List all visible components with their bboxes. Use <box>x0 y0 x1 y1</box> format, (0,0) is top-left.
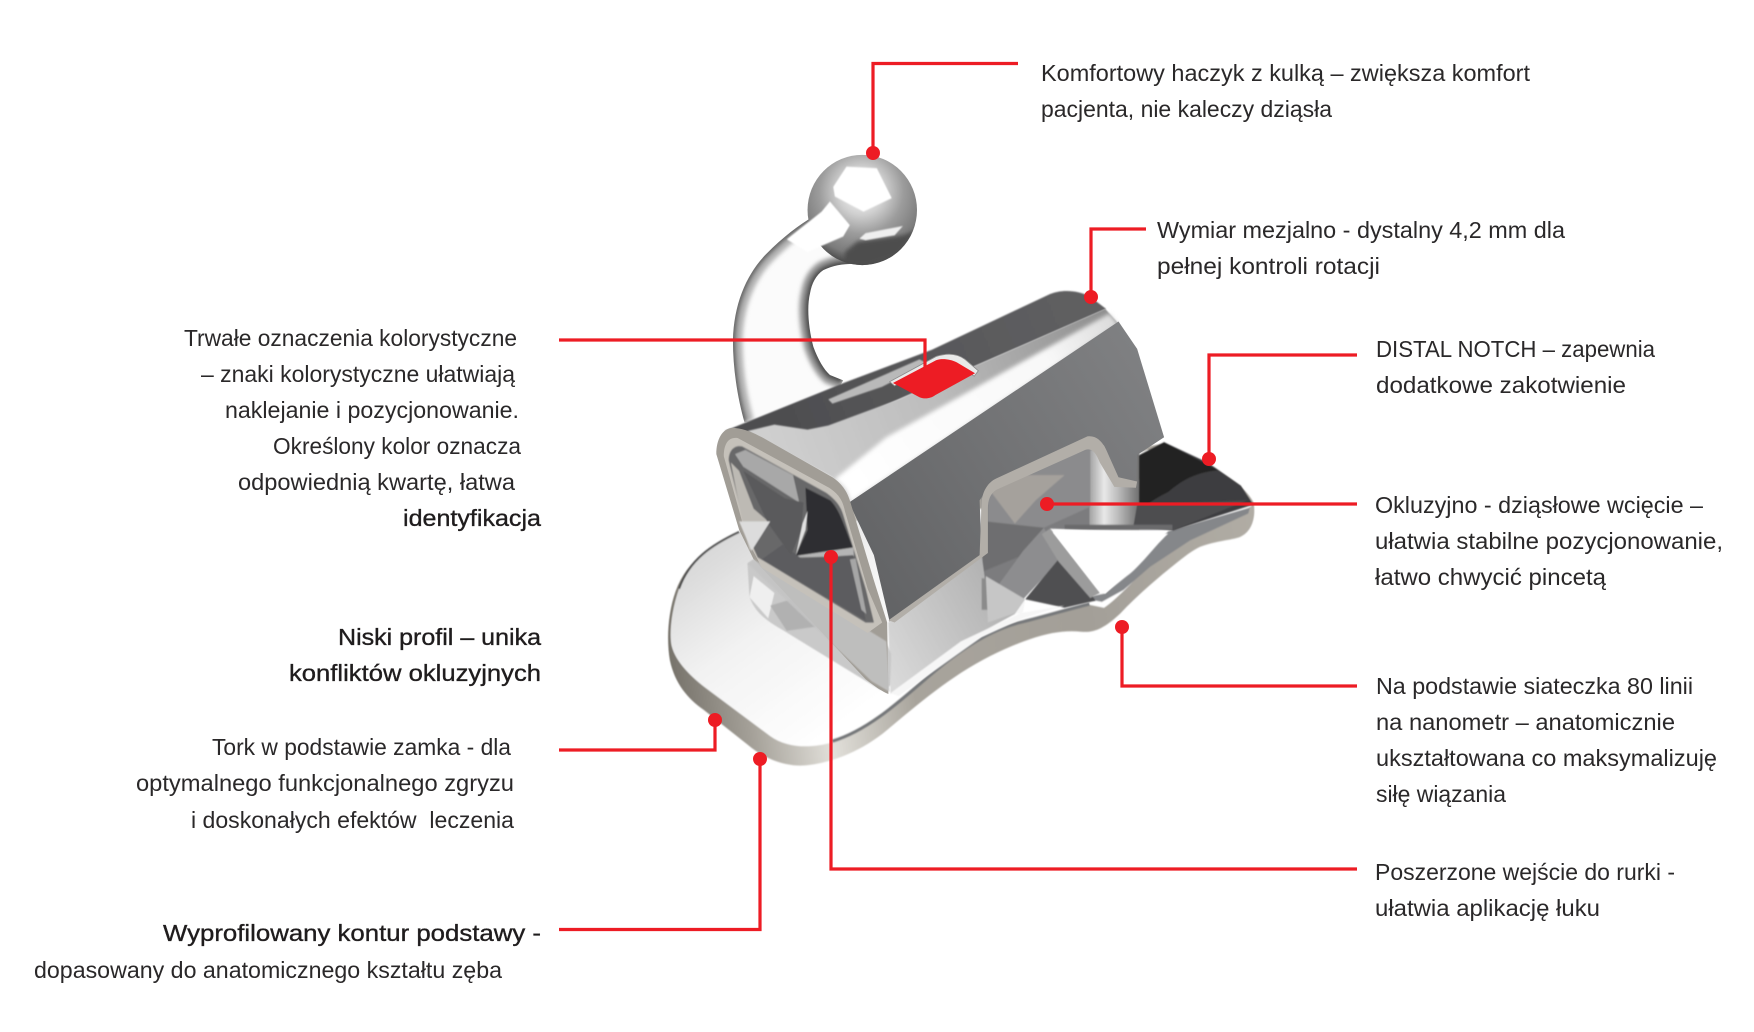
mesh base text <box>1376 673 1717 807</box>
callout: mesh base <box>1115 620 1717 807</box>
hook neck highlight <box>787 202 850 252</box>
contoured base text: dopasowany do anatomicznego kształtu zęba <box>34 957 502 983</box>
color marking text: naklejanie i pozycjonowanie. <box>225 397 519 423</box>
mesh base leader line <box>1122 627 1357 686</box>
hook leader line <box>873 64 1018 153</box>
distal notch text: dodatkowe zakotwienie <box>1376 372 1626 398</box>
upper light band <box>747 309 1118 502</box>
tube front frame <box>716 428 888 694</box>
notch recess and lower facets <box>888 446 1247 696</box>
width dot <box>1084 290 1098 304</box>
width leader line <box>1091 229 1146 297</box>
occluso-gingival text: Okluzyjno - dziąsłowe wcięcie – <box>1375 492 1703 518</box>
hook text: pacjenta, nie kaleczy dziąsła <box>1041 96 1332 122</box>
distal notch text: DISTAL NOTCH – zapewnia <box>1376 336 1655 362</box>
hook dot <box>866 146 880 160</box>
torque text: Tork w podstawie zamka - dla <box>212 734 511 760</box>
tube entry dot <box>824 550 838 564</box>
color marking text <box>184 325 541 531</box>
color marking text: odpowiednią kwartę, łatwa <box>238 469 515 495</box>
mesh base text: Na podstawie siateczka 80 linii <box>1376 673 1693 699</box>
torque text <box>136 734 514 833</box>
callout: widened tube entry <box>824 550 1675 921</box>
tube entry text <box>1375 859 1675 921</box>
contoured base leader line <box>559 759 760 930</box>
text: low profile: Niski profil – unika <box>338 624 541 650</box>
mesh base text: na nanometr – anatomicznie <box>1376 709 1675 735</box>
torque leader line <box>559 720 715 750</box>
callout: mesio-distal width <box>1084 217 1565 304</box>
occluso-gingival leader line <box>1047 502 1357 506</box>
tube entry text: ułatwia aplikację łuku <box>1375 895 1600 921</box>
text: low profile: konfliktów okluzyjnych <box>289 660 541 686</box>
distal wing dark surface <box>1133 442 1253 530</box>
illustration: orthodontic bracket <box>668 155 1254 766</box>
callout: contoured base <box>34 752 767 983</box>
hook text <box>1041 60 1531 122</box>
distal notch text <box>1376 336 1655 398</box>
color marking text: Określony kolor oznacza <box>273 433 521 459</box>
occluso-gingival dot <box>1040 497 1054 511</box>
callout: distal notch <box>1202 336 1655 466</box>
torque text: optymalnego funkcjonalnego zgryzu <box>136 770 514 796</box>
torque text: i doskonałych efektów leczenia <box>191 807 514 833</box>
callout: color marking <box>184 325 925 531</box>
color marking leader line <box>559 340 925 378</box>
width text: Wymiar mezjalno - dystalny 4,2 mm dla <box>1157 217 1565 243</box>
color marking text: identyfikacja <box>403 505 541 531</box>
top light ridge near marker <box>828 359 928 404</box>
tube body <box>716 291 1164 694</box>
tube opening interior <box>729 446 874 622</box>
occluso-gingival text: ułatwia stabilne pozycjonowanie, <box>1375 528 1723 554</box>
hook text: Komfortowy haczyk z kulką – zwiększa komfort <box>1041 60 1531 86</box>
color marking text: Trwałe oznaczenia kolorystyczne <box>184 325 517 351</box>
white highlight strip <box>834 314 1118 502</box>
contoured base text: Wyprofilowany kontur podstawy - <box>163 920 541 946</box>
text: low profile <box>289 624 541 686</box>
red color mark <box>893 359 975 398</box>
hook ball <box>787 155 917 267</box>
white triangular wing facet <box>1050 529 1168 593</box>
callout: torque in base <box>136 713 722 833</box>
width text <box>1157 217 1565 279</box>
contoured base dot <box>753 752 767 766</box>
occluso-gingival text <box>1375 492 1723 590</box>
contoured base text <box>34 920 541 983</box>
body side face <box>849 322 1164 622</box>
callout: comfort hook <box>866 60 1531 160</box>
bracket base pad <box>668 444 1254 766</box>
ghosted reflection below tube <box>747 559 891 690</box>
mesh base dot <box>1115 620 1129 634</box>
width text: pełnej kontroli rotacji <box>1157 253 1380 279</box>
color mark frame <box>890 354 978 386</box>
distal notch dot <box>1202 452 1216 466</box>
callout: occluso-gingival notch <box>1040 492 1723 590</box>
hook stem <box>733 220 851 422</box>
occluso-gingival text: łatwo chwycić pincetą <box>1375 564 1606 590</box>
mesh base text: siłę wiązania <box>1376 781 1506 807</box>
tube entry leader line <box>831 557 1357 869</box>
tube entry text: Poszerzone wejście do rurki - <box>1375 859 1675 885</box>
mesh base text: ukształtowana co maksymalizuję <box>1376 745 1717 771</box>
torque dot <box>708 713 722 727</box>
body top dark face <box>725 291 1106 441</box>
distal notch leader line <box>1209 355 1357 459</box>
notch rim <box>888 436 1137 622</box>
color marking text: – znaki kolorystyczne ułatwiają <box>201 361 515 387</box>
